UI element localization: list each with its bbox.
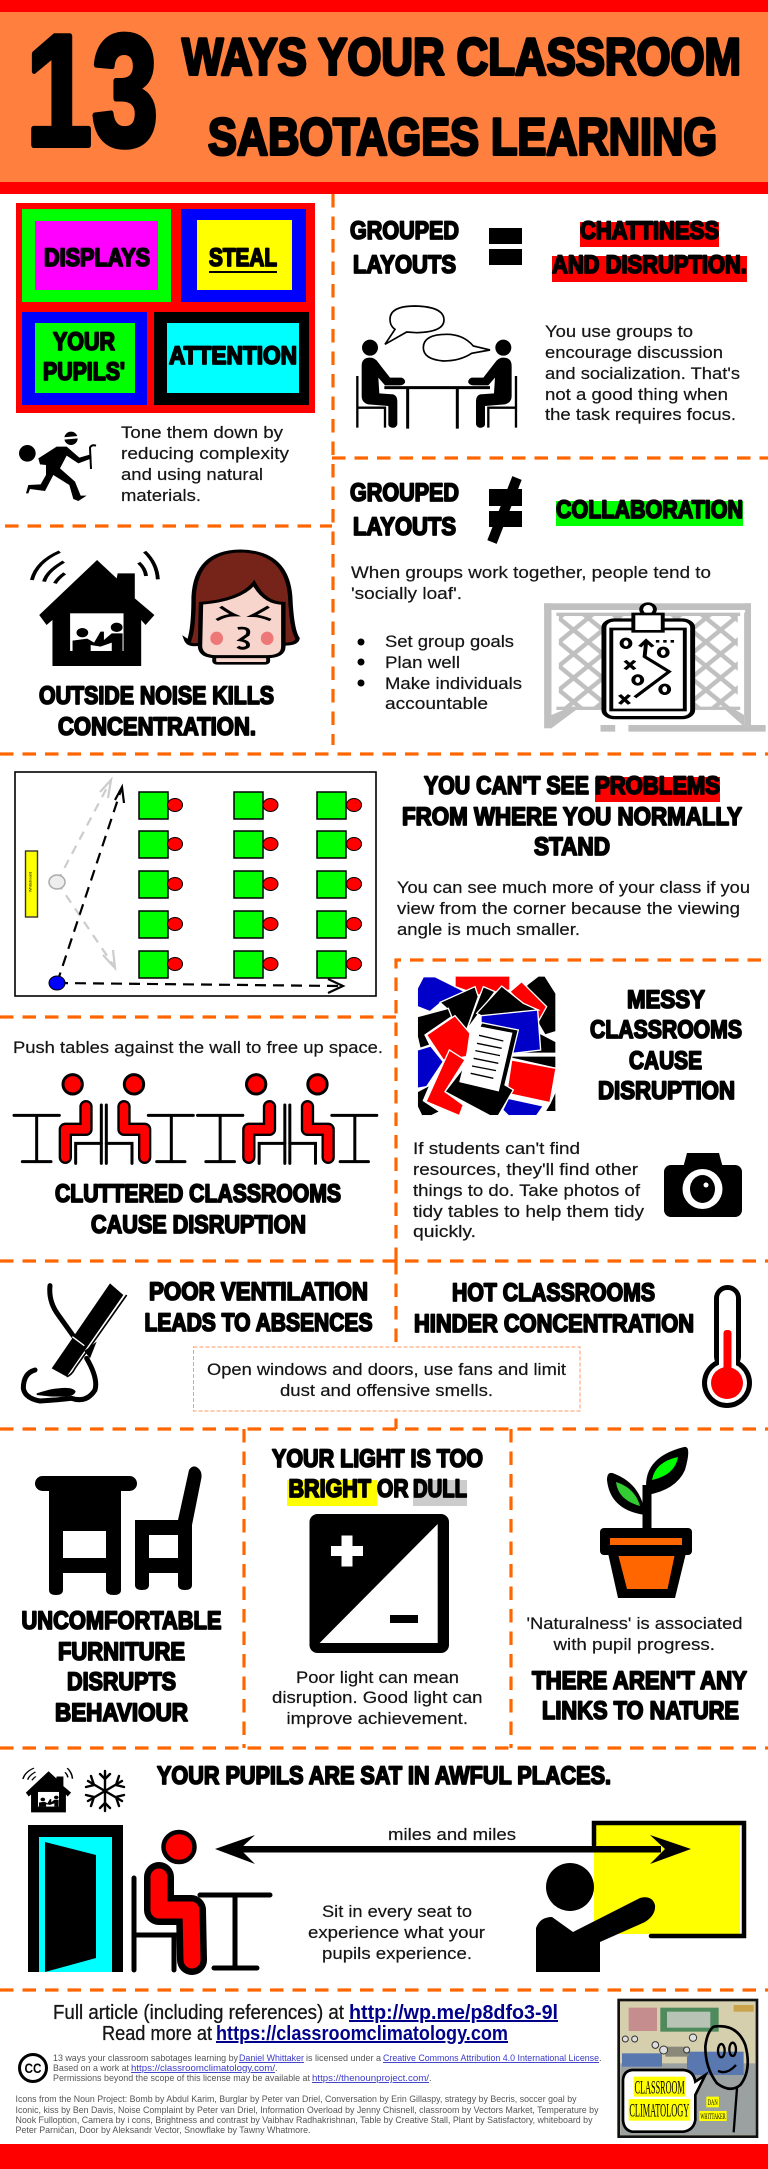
heading: poor ventilation: POOR VENTILATION [149, 1278, 368, 1306]
text: article links: Read more at [102, 2023, 212, 2045]
icon: snowflake [86, 1771, 124, 1811]
icon: door [28, 1825, 123, 1972]
text: if students can't find: tidy tables to help them tidy [413, 1202, 645, 1221]
panel: classroom climatology logo: CLIMATOLOGY [629, 2101, 689, 2122]
text: article links [53, 2002, 558, 2045]
text: poor light: improve achievement. [286, 1709, 468, 1728]
panel: displays poster [16, 203, 315, 413]
text: license: 13 ways your classroom sabotages learning by [53, 2053, 238, 2064]
heading: messy classrooms: CAUSE [629, 1047, 702, 1075]
heading: uncomfortable furniture: DISRUPTS [67, 1668, 176, 1696]
text: license: https://thenounproject.com/ [312, 2073, 429, 2084]
callout: open windows [194, 1347, 580, 1411]
text: license: . [275, 2063, 278, 2074]
panel: displays poster: DISPLAYS [44, 244, 150, 272]
panel: displays poster: ATTENTION [169, 342, 297, 370]
text: tone them down [121, 423, 290, 505]
text: you use groups: and socialization. That's [545, 364, 740, 383]
text: icon credits: Peter Parničan, Door by Aleksandr Vector, Snowflake by Tawny Whatmore. [16, 2125, 310, 2136]
text: you use groups: encourage discussion [545, 343, 723, 362]
bullet list [358, 632, 522, 713]
heading: grouped layouts equal chattiness: LAYOUTS [353, 251, 456, 279]
icon: creative commons: CC [24, 2060, 42, 2076]
panel: displays poster: PUPILS' [43, 358, 125, 386]
heading: hot classrooms: HINDER CONCENTRATION [414, 1310, 694, 1338]
text: poor light: Poor light can mean [296, 1668, 459, 1687]
heading: you can't see problems: YOU CAN'T SEE [424, 772, 589, 800]
text: socially loaf [351, 563, 711, 603]
heading: outside noise [39, 682, 274, 741]
heading: links to nature: LINKS TO NATURE [542, 1697, 739, 1725]
text: if students can't find: things to do. Take photos of [413, 1181, 640, 1200]
heading: uncomfortable furniture: FURNITURE [58, 1638, 185, 1666]
callout: open windows: dust and offensive smells. [280, 1381, 493, 1400]
text: if students can't find [413, 1139, 645, 1241]
text: push tables: Push tables against the wall to free up space. [13, 1038, 383, 1057]
chart: classroom floor plan: Whiteboard [28, 872, 32, 892]
text: icon credits [16, 2094, 599, 2136]
text: viewing angle [397, 878, 750, 939]
icon: table and chair [35, 1466, 202, 1595]
text: sit in every seat: experience what your [308, 1923, 485, 1942]
text: socially loaf: When groups work together, people tend to [351, 563, 711, 582]
heading: messy classrooms: DISRUPTION [598, 1077, 735, 1105]
heading: grouped layouts not equal collaboration: COLLABORATION [556, 496, 743, 524]
text: viewing angle: You can see much more of your class if you [397, 878, 750, 897]
icon: small noisy house [23, 1768, 72, 1812]
icon: conversation at a table [357, 306, 516, 429]
heading: you can't see problems: STAND [534, 833, 610, 861]
text: tone them down: materials. [121, 486, 201, 505]
icon: seated pupil at desk [134, 1832, 270, 1970]
text: license [53, 2053, 602, 2084]
heading: links to nature: THERE AREN'T ANY [532, 1667, 747, 1695]
heading: you can't see problems: PROBLEMS [595, 772, 720, 800]
header banner [0, 0, 768, 194]
heading: you can't see problems [402, 772, 742, 861]
heading: your light [272, 1445, 483, 1506]
heading: messy classrooms [590, 986, 742, 1105]
icon: covering face [186, 551, 298, 663]
heading: grouped layouts equal chattiness: GROUPED [350, 217, 459, 245]
text: tone them down: and using natural [121, 465, 263, 484]
bullet list: accountable [385, 694, 488, 713]
heading: poor ventilation [144, 1278, 372, 1337]
text: license: Daniel Whittaker [239, 2053, 304, 2064]
heading: grouped layouts not equal collaboration: LAYOUTS [353, 513, 456, 541]
icon: creative commons [20, 2054, 46, 2082]
heading: grouped layouts equal chattiness [350, 217, 747, 282]
text: sit in every seat: pupils experience. [322, 1944, 472, 1963]
heading: uncomfortable furniture [22, 1607, 222, 1727]
text: icon credits: Nook Fulloption, Camera by i cons, Brightness and contrast by Vaibhav Radhakrishnan, Table by Creative Stall, Plant by Satisfactory, whiteboard by [16, 2115, 593, 2126]
text: if students can't find: If students can't find [413, 1139, 580, 1158]
text: tone them down: reducing complexity [121, 444, 290, 463]
icon: burglar [19, 432, 96, 501]
text: poor light [272, 1668, 482, 1728]
heading: your light: BRIGHT [288, 1475, 371, 1503]
header banner: 13 [26, 3, 158, 179]
text: you use groups [545, 322, 740, 424]
text: if students can't find: quickly. [413, 1222, 476, 1241]
text: viewing angle: view from the corner because the viewing [397, 899, 740, 918]
heading: messy classrooms: CLASSROOMS [590, 1016, 742, 1044]
chart: classroom floor plan [15, 772, 376, 996]
heading: your light: OR [377, 1475, 408, 1503]
icon: nose and peg [23, 1283, 127, 1401]
heading: messy classrooms: MESSY [627, 986, 705, 1014]
icon: plant [600, 1447, 692, 1598]
panel: displays poster: YOUR [53, 328, 115, 356]
text: naturalness: 'Naturalness' is associated [526, 1614, 742, 1633]
icon: brightness and contrast [310, 1514, 449, 1653]
heading: grouped layouts not equal collaboration: GROUPED [350, 479, 459, 507]
text: naturalness: with pupil progress. [552, 1635, 715, 1654]
callout: open windows: Open windows and doors, use fans and limit [207, 1360, 566, 1379]
heading: cluttered classrooms: CLUTTERED CLASSROOMS [55, 1180, 341, 1208]
heading: hot classrooms [414, 1279, 694, 1338]
text: socially loaf: 'socially loaf'. [351, 584, 462, 603]
text: license: is licensed under a [306, 2053, 382, 2064]
text: article links: http://wp.me/p8dfo3-9l [349, 2002, 558, 2024]
text: sit in every seat [308, 1902, 485, 1963]
text: viewing angle: angle is much smaller. [397, 920, 580, 939]
icon: scattered papers [417, 976, 556, 1116]
heading: your light: DULL [413, 1475, 467, 1503]
text: tone them down: Tone them down by [121, 423, 284, 442]
text: license: https://classroomclimatology.com/ [131, 2063, 275, 2074]
text: icon credits: Iconic, kiss by Ben Davis, Noise Complaint by Peter van Driel, Information Overload by Jenny Chisnell, classroom by Vectors Market, Temperature by [16, 2105, 599, 2116]
icon: thermometer [702, 1285, 752, 1408]
panel: classroom climatology logo: WHITTAKER [700, 2111, 726, 2121]
icon: noisy house [32, 552, 158, 666]
heading: grouped layouts equal chattiness: CHATTINESS [580, 217, 719, 245]
icon: camera [664, 1153, 742, 1217]
heading: awful places: YOUR PUPILS ARE SAT IN AWFUL PLACES. [157, 1762, 611, 1790]
text: license: Based on a work at [53, 2063, 129, 2074]
arrow: miles and miles: miles and miles [388, 1825, 516, 1844]
text: article links: https://classroomclimatology.com [216, 2023, 508, 2045]
heading: grouped layouts equal chattiness: AND DISRUPTION. [552, 251, 747, 279]
text: license: Creative Commons Attribution 4.0 International License [383, 2053, 599, 2064]
heading: uncomfortable furniture: BEHAVIOUR [55, 1699, 188, 1727]
icon: goal and clipboard [544, 603, 766, 732]
heading: outside noise: OUTSIDE NOISE KILLS [39, 682, 274, 710]
heading: poor ventilation: LEADS TO ABSENCES [144, 1309, 372, 1337]
bullet list: Plan well [385, 653, 460, 672]
arrow: miles and miles [215, 1825, 691, 1864]
footer band [0, 2144, 768, 2169]
text: naturalness [526, 1614, 742, 1654]
icon: whiteboard [594, 1823, 744, 1936]
text: you use groups: You use groups to [545, 322, 693, 341]
heading: cluttered classrooms [55, 1180, 341, 1239]
panel: displays poster: STEAL [209, 244, 277, 272]
text: you use groups: the task requires focus. [545, 405, 736, 424]
text: license: Permissions beyond the scope of this license may be available at [53, 2073, 310, 2084]
text: icon credits: Icons from the Noun Project: Bomb by Abdul Karim, Burglar by Peter van Driel, Conversation by Erin Gillaspy, strategy by Becris, soccer goal by [16, 2094, 577, 2105]
heading: uncomfortable furniture: UNCOMFORTABLE [22, 1607, 222, 1635]
text: poor light: disruption. Good light can [272, 1688, 482, 1707]
heading: outside noise: CONCENTRATION. [58, 713, 256, 741]
heading: cluttered classrooms: CAUSE DISRUPTION [91, 1211, 306, 1239]
text: sit in every seat: Sit in every seat to [322, 1902, 472, 1921]
text: you use groups: not a good thing when [545, 385, 728, 404]
panel: classroom climatology logo [619, 2000, 757, 2137]
heading: your light: YOUR LIGHT IS TOO [272, 1445, 483, 1473]
bullet list: Make individuals [385, 674, 522, 693]
heading: grouped layouts not equal collaboration [350, 478, 743, 542]
text: license: . [599, 2053, 602, 2064]
text: license: . [429, 2073, 432, 2084]
heading: links to nature [532, 1667, 747, 1725]
bullet list: Set group goals [385, 632, 514, 651]
text: article links: Full article (including references) at [53, 2002, 344, 2024]
text: if students can't find: resources, they'll find other [413, 1160, 638, 1179]
icon: teacher pointing [536, 1863, 655, 1972]
panel: classroom climatology logo: CLASSROOM [635, 2077, 685, 2098]
heading: hot classrooms: HOT CLASSROOMS [452, 1279, 655, 1307]
icon: rows of seated pupils [14, 1075, 377, 1163]
panel: classroom climatology logo: DAN [708, 2097, 718, 2107]
